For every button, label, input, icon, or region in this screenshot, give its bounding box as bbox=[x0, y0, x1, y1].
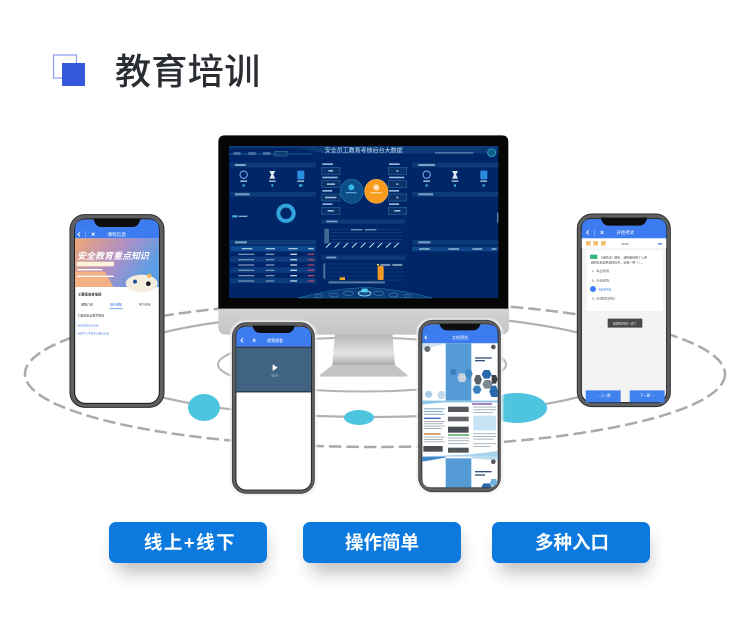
phone right: exam bbox=[577, 214, 670, 407]
video player: 00:37 bbox=[272, 374, 279, 378]
left column stats bbox=[230, 163, 316, 197]
phone screen bbox=[581, 218, 667, 403]
blue progress bubble bbox=[340, 179, 363, 203]
question card: 专职消防队 bbox=[598, 287, 612, 291]
course tabs: 相关课程 bbox=[110, 302, 122, 307]
monitor stand base bbox=[320, 365, 408, 377]
course list: 有好的课安全培训 bbox=[77, 323, 99, 327]
app header bar bbox=[236, 327, 311, 347]
question card: B、企业消防队 bbox=[592, 278, 610, 282]
feature button shadow 3 bbox=[500, 536, 648, 572]
question card: 消防队和志愿消防队外，还有一种（）。 bbox=[591, 260, 644, 265]
phone screen bbox=[75, 219, 159, 403]
phone screen bbox=[236, 326, 311, 490]
phone notch bbox=[601, 218, 647, 226]
feature button: simple operation: 操作简单 bbox=[345, 532, 419, 553]
next question button bbox=[630, 390, 665, 402]
section icon: overlapping squares bbox=[54, 55, 85, 86]
dashboard header: 安全员工教育考核后台大数据 bbox=[325, 146, 403, 154]
phone notch bbox=[252, 326, 295, 333]
course list: 有效学习学校安全教育培训 bbox=[77, 331, 110, 335]
app header bar bbox=[422, 325, 498, 343]
orbit node right bbox=[487, 393, 547, 423]
donut chart bbox=[232, 206, 294, 221]
course list bbox=[75, 313, 159, 337]
brochure page one bbox=[422, 343, 498, 401]
course tabs: 课程介绍 bbox=[81, 302, 93, 307]
phone body bbox=[419, 320, 500, 492]
inner solid orbit bbox=[218, 338, 506, 392]
dashboard screen bbox=[229, 146, 498, 298]
course banner: 安全教育重点知识 bbox=[77, 251, 150, 261]
phone body bbox=[577, 214, 670, 407]
orbit rings bbox=[25, 301, 725, 447]
next question button: 下一题 → bbox=[640, 393, 654, 398]
monitor silver chin bbox=[218, 307, 509, 335]
exam toolbar: 26/30 bbox=[621, 242, 629, 246]
trend line chart bbox=[322, 219, 405, 247]
previous question button bbox=[586, 390, 621, 402]
feature button shadow 2 bbox=[311, 536, 459, 572]
course banner bbox=[75, 238, 159, 292]
bar chart bbox=[322, 255, 405, 283]
orbit node left bbox=[188, 394, 220, 421]
toast message: 答题情况后一套了 bbox=[613, 320, 637, 325]
orange progress bubble bbox=[365, 179, 388, 203]
app header bar: 课程信息 bbox=[107, 231, 126, 238]
bottom navigation dock bbox=[298, 287, 432, 298]
feature button: online and offline: 线上+线下 bbox=[144, 532, 236, 553]
question card: D、商城团体消防队 bbox=[592, 297, 616, 301]
orbit node centre bbox=[344, 410, 374, 425]
phone screen bbox=[422, 324, 498, 488]
phone left: course info bbox=[70, 215, 164, 407]
phone bottom right: document bbox=[416, 318, 503, 494]
app header bar bbox=[582, 219, 666, 238]
feature button: multiple entrances: 多种入口 bbox=[535, 532, 609, 553]
phone notch bbox=[439, 324, 481, 330]
monitor stand neck bbox=[332, 333, 395, 365]
outer dashed orbit bbox=[25, 301, 725, 447]
course tabs: 学习评论 bbox=[139, 302, 151, 307]
title: 教育培训 bbox=[115, 51, 261, 92]
brochure page three bbox=[422, 457, 498, 487]
previous question button: ← 上一题 bbox=[596, 393, 611, 398]
phone notch bbox=[93, 218, 141, 227]
course list: 工事是安全教育培训 bbox=[77, 313, 104, 318]
question card: 《消防法》规定，消防组织除了公安 bbox=[599, 254, 647, 259]
video player bbox=[236, 347, 311, 392]
course tabs bbox=[81, 302, 151, 309]
app header bar: 文档预览 bbox=[452, 334, 468, 340]
app header bar: 开始考试 bbox=[617, 229, 635, 236]
phone body bbox=[70, 215, 164, 407]
feature button: multiple entrances bbox=[492, 522, 650, 563]
dashboard header bbox=[229, 146, 498, 157]
monitor bbox=[218, 135, 509, 377]
feature button: online and offline bbox=[109, 522, 267, 563]
right column stats bbox=[412, 163, 498, 251]
middle solid orbit bbox=[105, 313, 635, 417]
brochure page two bbox=[422, 401, 498, 457]
feature button shadow 1 bbox=[117, 536, 265, 572]
app header bar: 视频观看 bbox=[267, 337, 283, 343]
feature button: simple operation bbox=[303, 522, 461, 563]
centre metric boxes right bbox=[388, 163, 407, 214]
question card bbox=[587, 250, 663, 311]
phone bottom left: video bbox=[230, 320, 317, 496]
left data table bbox=[230, 240, 316, 283]
monitor black bezel bbox=[218, 135, 508, 309]
question card: A、事业消防队 bbox=[592, 269, 610, 273]
toast message bbox=[608, 319, 642, 328]
centre metric boxes left bbox=[322, 163, 340, 214]
exam toolbar bbox=[582, 238, 666, 248]
app header bar bbox=[75, 220, 159, 238]
phone body bbox=[232, 323, 314, 493]
course title: 工要是安全培训 bbox=[78, 292, 102, 297]
